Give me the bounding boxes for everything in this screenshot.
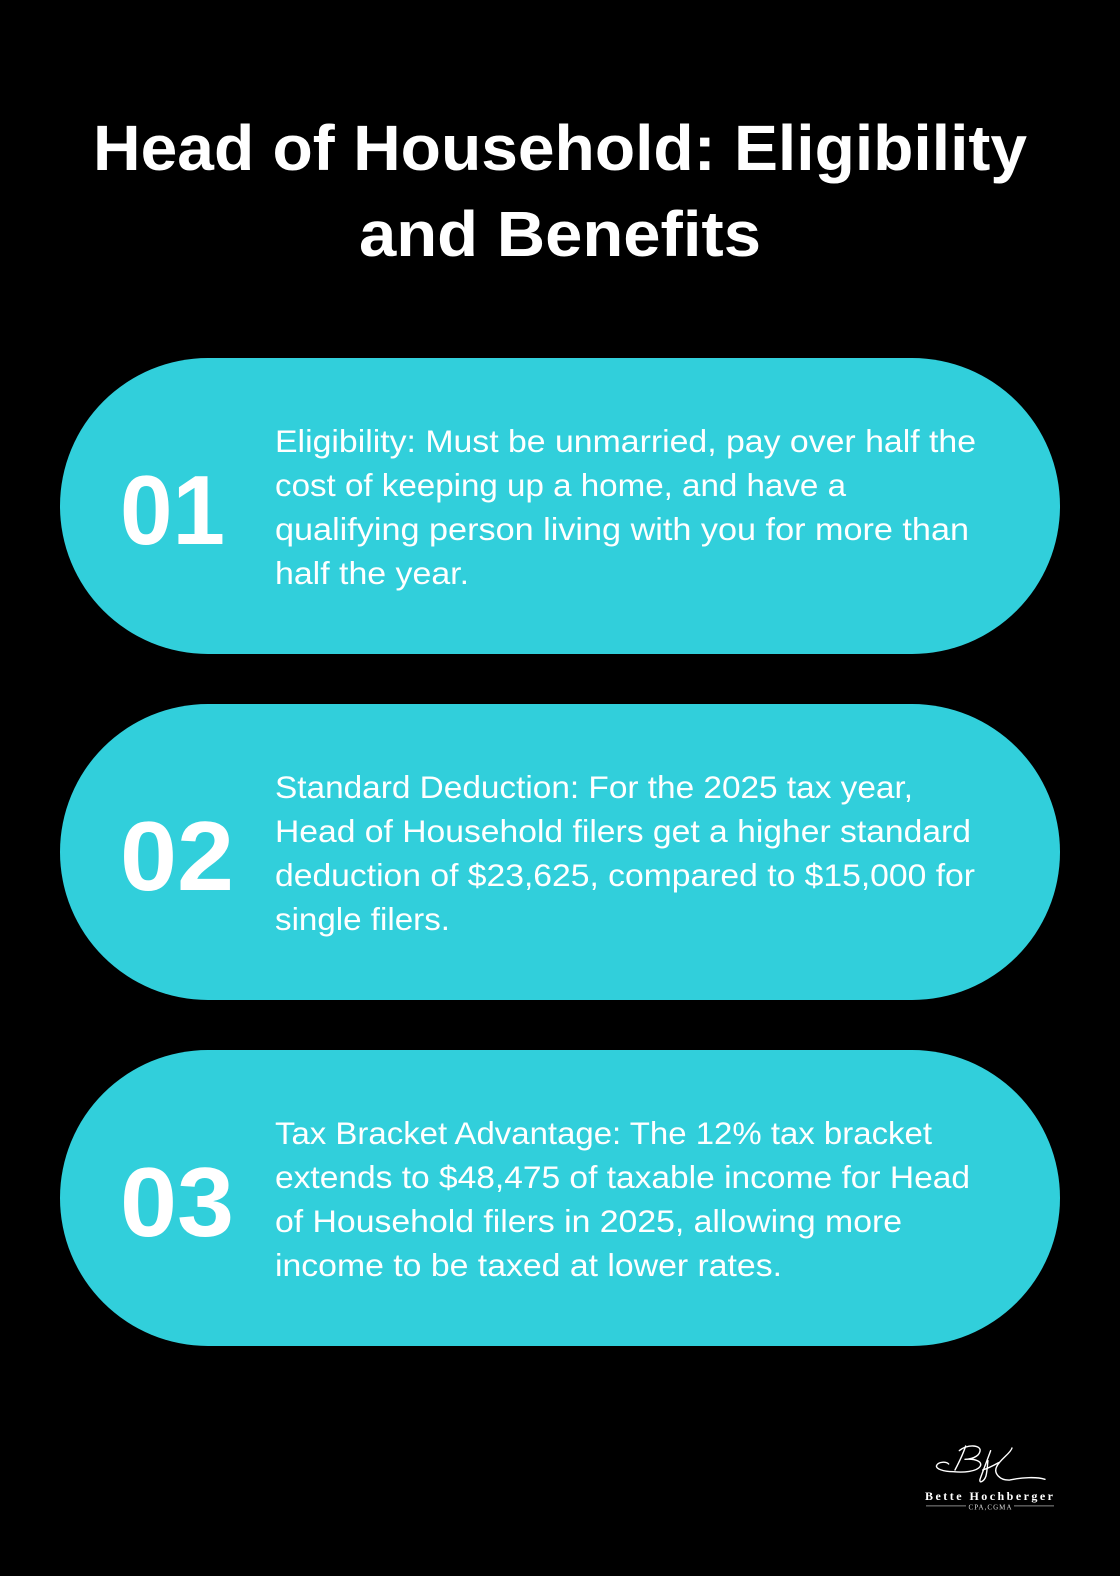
panel: eligibility (60, 358, 1060, 654)
standard deduction text: deduction of $23,625, compared to $15,000 for (275, 857, 975, 893)
standard deduction text: Head of Household filers get a higher standard (275, 813, 971, 849)
title: and Benefits (359, 198, 761, 270)
eligibility text: half the year. (275, 555, 469, 591)
tax bracket text: of Household filers in 2025, allowing more (275, 1203, 902, 1239)
standard deduction text (275, 769, 975, 937)
logo credentials: CPA,CGMA (968, 1504, 1012, 1512)
tax bracket text: extends to $48,475 of taxable income for Head (275, 1159, 970, 1195)
logo: Bette Hochberger signature (925, 1446, 1054, 1512)
tax bracket text (275, 1115, 970, 1283)
panel: tax bracket advantage (60, 1050, 1060, 1346)
icon: signature monogram (936, 1446, 1045, 1482)
step number 02: 02 (120, 801, 234, 911)
eligibility text (275, 423, 976, 591)
step number 01: 01 (120, 455, 225, 565)
step number 03: 03 (120, 1147, 234, 1257)
eligibility text: qualifying person living with you for more than (275, 511, 969, 547)
standard deduction text: Standard Deduction: For the 2025 tax year, (275, 769, 913, 805)
panel: standard deduction (60, 704, 1060, 1000)
logo name: Bette Hochberger (925, 1489, 1054, 1503)
standard deduction text: single filers. (275, 901, 450, 937)
eligibility text: Eligibility: Must be unmarried, pay over half the (275, 423, 976, 459)
tax bracket text: income to be taxed at lower rates. (275, 1247, 782, 1283)
title (93, 112, 1027, 270)
tax bracket text: Tax Bracket Advantage: The 12% tax bracket (275, 1115, 932, 1151)
eligibility text: cost of keeping up a home, and have a (275, 467, 846, 503)
title: Head of Household: Eligibility (93, 112, 1027, 184)
